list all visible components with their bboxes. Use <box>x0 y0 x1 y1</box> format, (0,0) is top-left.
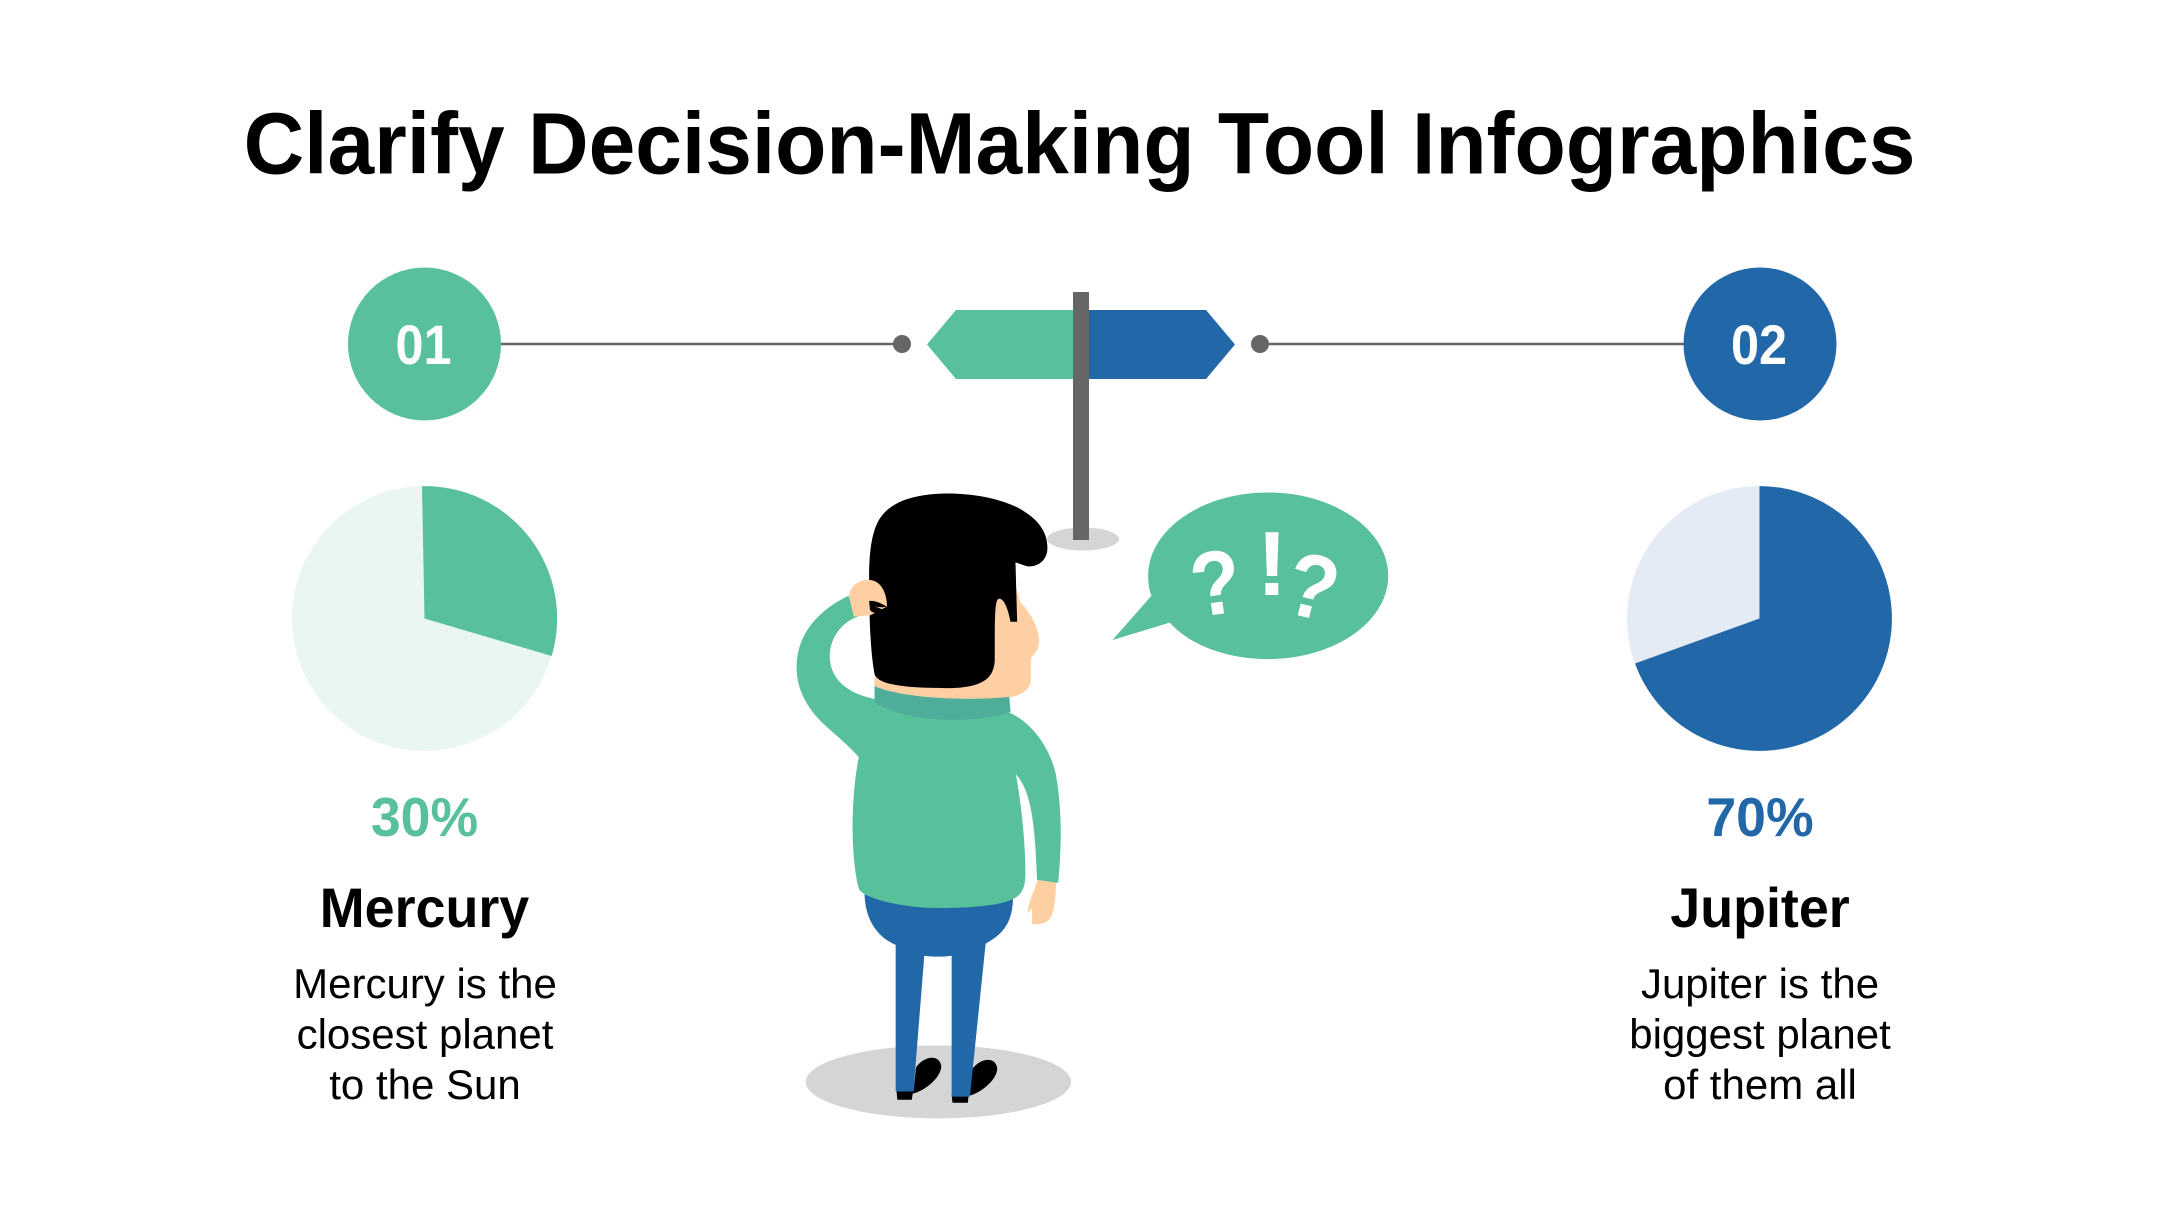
sign arrow: left green <box>927 310 1075 379</box>
hair <box>869 493 1047 688</box>
pie chart: Jupiter 70% <box>1627 486 1892 751</box>
badge 01 <box>348 268 501 420</box>
signpost <box>927 292 1235 550</box>
heading: Jupiter: Jupiter <box>1670 877 1850 939</box>
neck and face <box>875 583 1039 699</box>
text block: Mercury description: to the Sun <box>329 1061 521 1108</box>
text block: Jupiter description: of them all <box>1663 1061 1857 1108</box>
stat: 70%: 70% <box>1706 786 1814 848</box>
question and exclamation marks: ? <box>1276 532 1349 642</box>
shoes <box>896 1058 997 1103</box>
badge 02: 02 <box>1731 315 1787 377</box>
badge 01: 01 <box>395 315 452 377</box>
pie chart: Mercury 30% <box>292 486 557 751</box>
stat: 30%: 30% <box>371 786 478 848</box>
speech bubble <box>1113 493 1388 659</box>
ground shadow <box>806 1045 1071 1118</box>
badge 02 <box>1684 268 1836 420</box>
text block: Mercury description: Mercury is the <box>293 960 557 1007</box>
right hand <box>1028 879 1056 924</box>
heading: Mercury: Mercury <box>320 877 530 939</box>
text block: Mercury description <box>293 960 557 1108</box>
text block: Jupiter description: biggest planet <box>1629 1010 1891 1058</box>
question and exclamation marks <box>1184 514 1349 642</box>
collar <box>875 686 1011 720</box>
fingers <box>869 601 887 613</box>
connector line: left <box>498 335 911 353</box>
text block: Jupiter description: Jupiter is the <box>1641 960 1879 1007</box>
question and exclamation marks: ! <box>1257 514 1287 615</box>
character: confused person seen from behind <box>797 493 1071 1118</box>
question and exclamation marks: ? <box>1184 530 1248 637</box>
connector line: right <box>1251 335 1688 353</box>
title: Clarify Decision-Making Tool Infographics <box>244 96 1915 193</box>
text block: Jupiter description <box>1629 960 1891 1108</box>
trousers <box>865 893 1013 1097</box>
sweater <box>797 596 1061 908</box>
hand scratching head <box>849 580 887 617</box>
post base shadow <box>1047 528 1119 550</box>
sign arrow: right blue <box>1087 310 1235 379</box>
text block: Mercury description: closest planet <box>297 1010 554 1058</box>
post <box>1073 292 1089 540</box>
